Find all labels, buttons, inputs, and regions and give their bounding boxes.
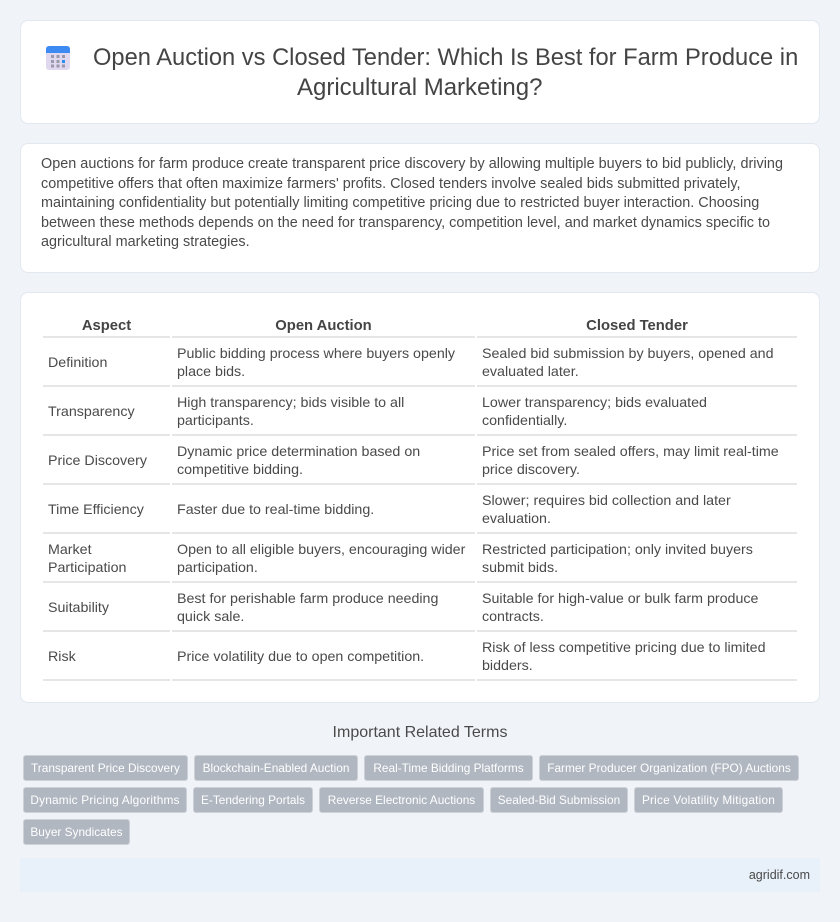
heading: important related terms: Important Related Terms [333, 724, 507, 741]
tag [634, 787, 783, 813]
tag [23, 819, 130, 845]
text block: introduction: Open auctions for farm produce create transparent price discovery by allowing multiple buyers to bid publicly, driving [41, 156, 783, 172]
row: risk: Risk [48, 648, 76, 664]
title: Agricultural Marketing? [297, 74, 542, 101]
tag [539, 755, 799, 781]
row: market participation: Open to all eligible buyers, encouraging wider [177, 542, 465, 558]
table header: Aspect [82, 318, 131, 334]
tag: Sealed-Bid Submission [498, 793, 620, 807]
row: price discovery: competitive bidding. [177, 462, 303, 478]
text block: introduction [41, 156, 783, 250]
related terms tags [23, 755, 799, 845]
row: risk: Price volatility due to open competition. [177, 648, 424, 664]
panel: title card [20, 20, 820, 124]
tag: Blockchain-Enabled Auction [203, 761, 349, 775]
row: price discovery: Price Discovery [48, 452, 147, 468]
table header: Closed Tender [586, 318, 688, 334]
row: time efficiency: Faster due to real-time bidding. [177, 502, 374, 518]
row: transparency: Lower transparency; bids evaluated [482, 394, 707, 410]
row: suitability: Best for perishable farm produce needing [177, 590, 438, 606]
tag [23, 787, 187, 813]
row: market participation: submit bids. [482, 560, 558, 576]
row: definition [48, 346, 774, 380]
row: transparency: confidentially. [482, 412, 567, 428]
row: time efficiency: Time Efficiency [48, 502, 144, 518]
row: price discovery: price discovery. [482, 462, 580, 478]
row: definition: evaluated later. [482, 364, 579, 380]
row: transparency [48, 394, 707, 428]
tag: Real-Time Bidding Platforms [373, 761, 524, 775]
tag [319, 787, 484, 813]
row: definition: Sealed bid submission by buyers, opened and [482, 346, 774, 362]
text block: introduction: agricultural marketing strategies. [41, 234, 250, 250]
panel: introduction [20, 143, 820, 273]
row: price discovery: Price set from sealed offers, may limit real-time [482, 444, 779, 460]
tag [490, 787, 628, 813]
table header [82, 318, 688, 334]
text block: introduction: competitive offers that often maximize farmers' profits. Closed tenders involve sealed bids submitted privately, [41, 176, 741, 192]
tag: Buyer Syndicates [30, 825, 123, 839]
row: definition: place bids. [177, 364, 245, 380]
row: market participation [48, 542, 753, 576]
text block: introduction: maintaining confidentiality but potentially limiting competitive pricing due to restricted buyer interaction. Choosing [41, 195, 759, 211]
row: price discovery: Dynamic price determination based on [177, 444, 420, 460]
text block: introduction: between these methods depends on the need for transparency, competition level, and market dynamics specific to [41, 214, 770, 230]
row: suitability: Suitable for high-value or bulk farm produce [482, 590, 758, 606]
row: transparency: participants. [177, 412, 254, 428]
row: risk [48, 640, 766, 674]
tag: Farmer Producer Organization (FPO) Auctions [547, 761, 791, 775]
row: time efficiency: Slower; requires bid collection and later [482, 492, 731, 508]
row: time efficiency [48, 492, 731, 526]
row: risk: bidders. [482, 658, 533, 674]
title [93, 45, 798, 101]
row: market participation: Participation [48, 560, 126, 576]
row: suitability: quick sale. [177, 608, 244, 624]
row: transparency: Transparency [48, 404, 135, 420]
tag [364, 755, 533, 781]
row: transparency: High transparency; bids visible to all [177, 394, 404, 410]
row: definition: Public bidding process where buyers openly [177, 346, 455, 362]
tag: Transparent Price Discovery [31, 761, 180, 775]
panel: comparison table card [20, 292, 820, 703]
row: suitability [48, 590, 758, 624]
row: market participation: participation. [177, 560, 258, 576]
footer bar [20, 858, 820, 892]
tag: Dynamic Pricing Algorithms [30, 793, 180, 807]
footer source: agridif.com [749, 868, 810, 882]
tag [194, 755, 358, 781]
row: market participation: Restricted participation; only invited buyers [482, 542, 753, 558]
row: time efficiency: evaluation. [482, 510, 551, 526]
row: suitability: Suitability [48, 600, 109, 616]
row: risk: Risk of less competitive pricing due to limited [482, 640, 766, 656]
row: suitability: contracts. [482, 608, 544, 624]
row: definition: Definition [48, 354, 107, 370]
table header: Open Auction [275, 318, 372, 334]
icon: calendar [46, 46, 70, 70]
tag [23, 755, 188, 781]
tag [193, 787, 313, 813]
title: Open Auction vs Closed Tender: Which Is Best for Farm Produce in [93, 45, 798, 71]
tag: Reverse Electronic Auctions [328, 793, 475, 807]
tag: E-Tendering Portals [201, 793, 305, 807]
row: market participation: Market [48, 542, 92, 558]
comparison table [43, 318, 797, 681]
tag: Price Volatility Mitigation [642, 793, 775, 807]
row: price discovery [48, 444, 779, 478]
